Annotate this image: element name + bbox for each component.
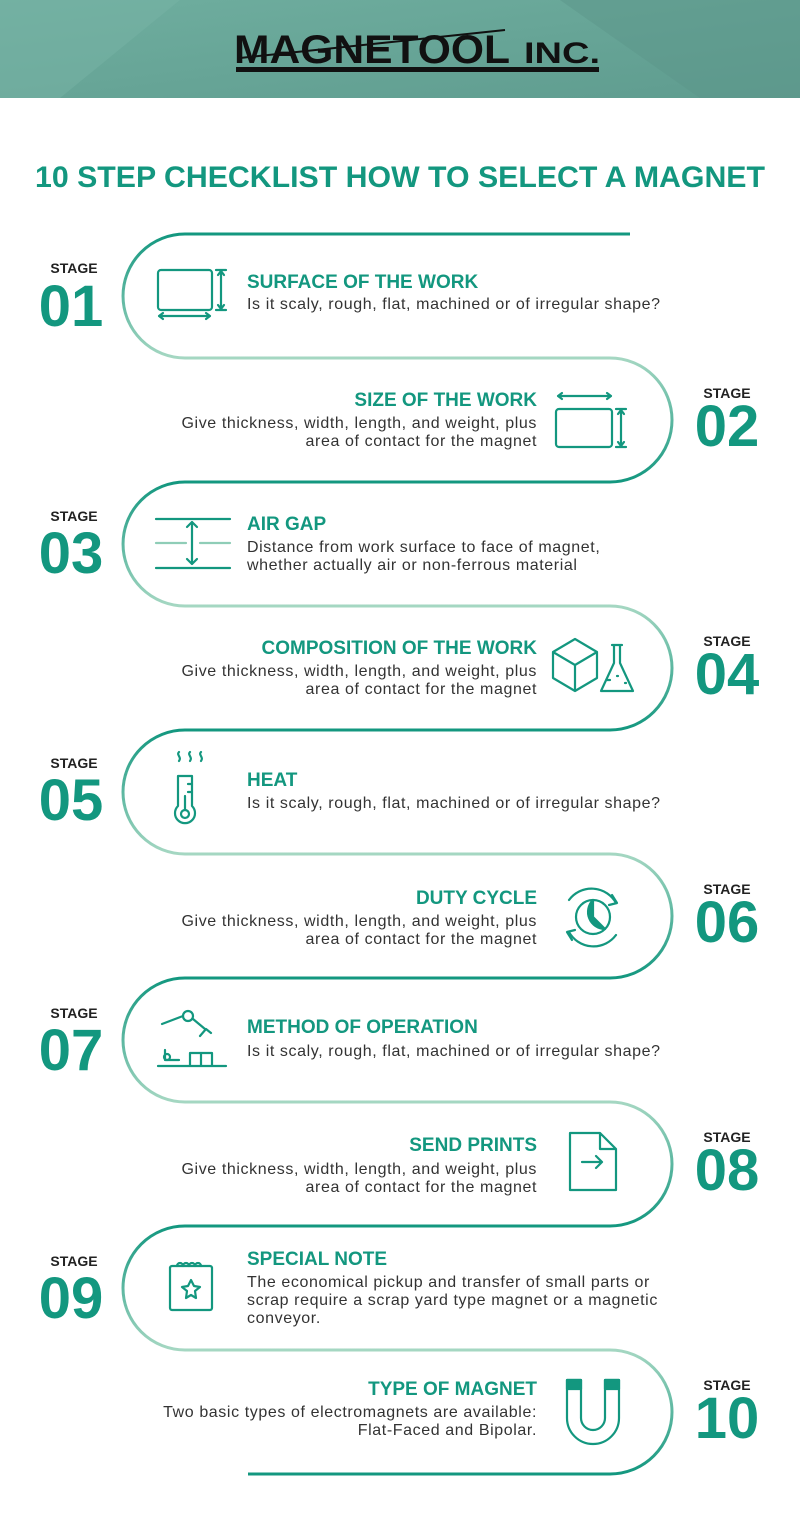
stage 01: SURFACE OF THE WORK xyxy=(247,272,478,293)
icon: composition xyxy=(553,639,633,691)
stage 01: STAGE xyxy=(50,260,98,276)
stage 07: STAGE xyxy=(50,1005,98,1021)
icon: note xyxy=(170,1263,212,1310)
stage 08: SEND PRINTS xyxy=(409,1135,537,1156)
stage 02: STAGE xyxy=(703,385,751,401)
stage 07: METHOD OF OPERATION xyxy=(247,1017,478,1038)
stage 09: 09 xyxy=(39,1266,103,1331)
stage 03: 03 xyxy=(39,521,103,586)
stage 01: Is it scaly, rough, flat, machined or of irregular shape? xyxy=(247,296,661,313)
stage 02: Give thickness, width, length, and weight, plus xyxy=(182,415,537,432)
stage 06: DUTY CYCLE xyxy=(416,888,537,909)
stage 03 xyxy=(39,508,600,586)
stage 04: STAGE xyxy=(703,633,751,649)
stage 06: Give thickness, width, length, and weight, plus xyxy=(182,913,537,930)
stage 04: Give thickness, width, length, and weight, plus xyxy=(182,663,537,680)
stage 03: whether actually air or non-ferrous material xyxy=(246,557,578,574)
stage 07: Is it scaly, rough, flat, machined or of irregular shape? xyxy=(247,1043,661,1060)
icon: air gap xyxy=(156,519,230,568)
stage 03: AIR GAP xyxy=(247,514,326,535)
stage 04: area of contact for the magnet xyxy=(306,681,537,698)
stage 09: scrap require a scrap yard type magnet or a magnetic xyxy=(247,1292,658,1309)
stage 09: conveyor. xyxy=(247,1310,321,1327)
stage 02 xyxy=(182,385,759,459)
stage 04 xyxy=(182,633,759,707)
stage 07 xyxy=(39,1005,661,1083)
stage 01: 01 xyxy=(39,274,103,339)
icon: surface xyxy=(158,270,226,319)
stage 05 xyxy=(39,752,661,833)
icon: robot arm xyxy=(158,1011,226,1066)
icon: document xyxy=(570,1133,616,1190)
header band xyxy=(0,0,800,98)
stage 10: TYPE OF MAGNET xyxy=(368,1379,537,1400)
icon: size xyxy=(556,393,626,447)
icon: heat xyxy=(175,752,202,823)
stage 05: 05 xyxy=(39,768,103,833)
stage 05: STAGE xyxy=(50,755,98,771)
icon: duty cycle xyxy=(567,889,617,946)
stage 06 xyxy=(182,881,759,955)
stage 02: SIZE OF THE WORK xyxy=(354,390,537,411)
stage 08: Give thickness, width, length, and weight, plus xyxy=(182,1161,537,1178)
stage 05: HEAT xyxy=(247,770,298,791)
stage 08: 08 xyxy=(695,1138,759,1203)
stage 06: STAGE xyxy=(703,881,751,897)
stage 08: area of contact for the magnet xyxy=(306,1179,537,1196)
stage 04: 04 xyxy=(695,642,759,707)
stage 02: 02 xyxy=(695,394,759,459)
stage 07: 07 xyxy=(39,1018,103,1083)
stage 08 xyxy=(182,1129,759,1203)
logo: INC. xyxy=(524,37,600,70)
stage 10: Flat-Faced and Bipolar. xyxy=(358,1422,537,1439)
stage 10: STAGE xyxy=(703,1377,751,1393)
stage 05: Is it scaly, rough, flat, machined or of irregular shape? xyxy=(247,795,661,812)
stage 03: STAGE xyxy=(50,508,98,524)
stage 10: 10 xyxy=(695,1386,759,1451)
stage 08: STAGE xyxy=(703,1129,751,1145)
serpentine path xyxy=(123,234,672,1474)
stage 03: Distance from work surface to face of magnet, xyxy=(247,539,600,556)
stage 04: COMPOSITION OF THE WORK xyxy=(262,638,537,659)
stage 10: Two basic types of electromagnets are available: xyxy=(163,1404,537,1421)
stage 09: The economical pickup and transfer of small parts or xyxy=(247,1274,650,1291)
stage 06: area of contact for the magnet xyxy=(306,931,537,948)
logo: MAGNETOOL xyxy=(234,28,510,72)
stage 09: STAGE xyxy=(50,1253,98,1269)
stage 09: SPECIAL NOTE xyxy=(247,1249,387,1270)
stage 10 xyxy=(163,1377,759,1451)
title: 10 STEP CHECKLIST HOW TO SELECT A MAGNET xyxy=(35,161,765,194)
stage 06: 06 xyxy=(695,890,759,955)
stage 02: area of contact for the magnet xyxy=(306,433,537,450)
stage 09 xyxy=(39,1249,658,1331)
icon: magnet xyxy=(567,1380,619,1444)
stage 01 xyxy=(39,260,661,339)
